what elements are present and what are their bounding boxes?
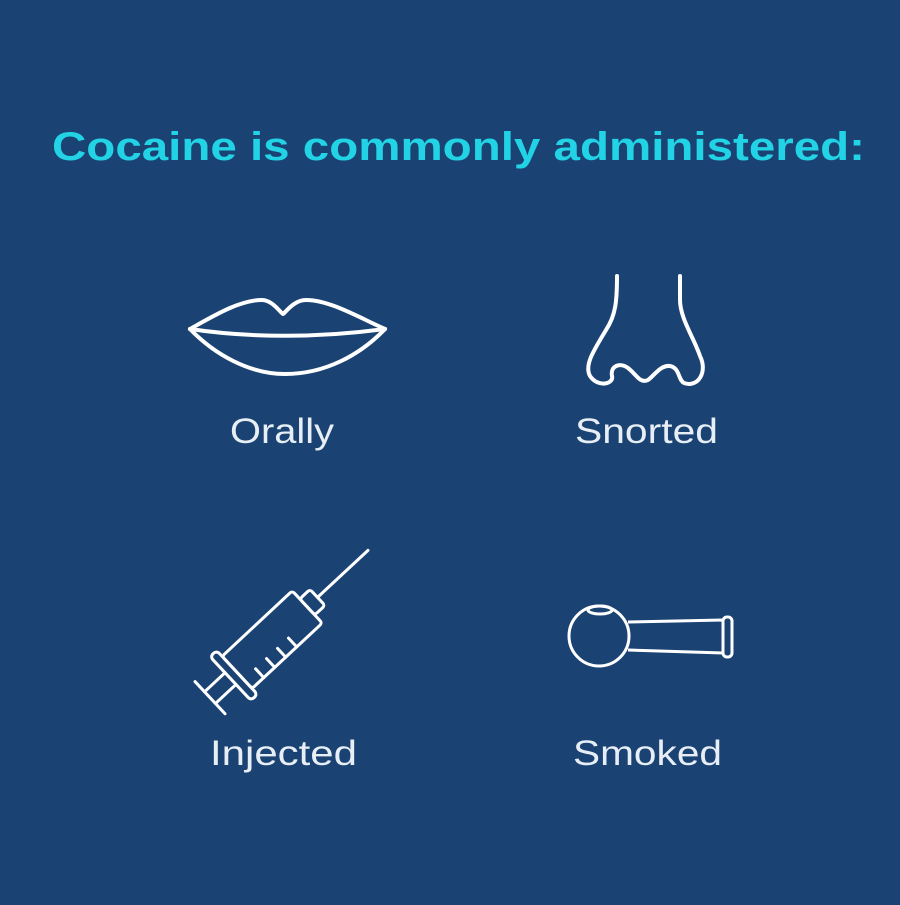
label: Injected: Injected: [210, 734, 357, 773]
label: Smoked: Smoked: [573, 734, 722, 773]
icon: lips: [190, 300, 385, 374]
icon: pipe: [569, 606, 732, 666]
title: Cocaine is commonly administered:: [52, 125, 865, 169]
label: Snorted: Snorted: [575, 412, 718, 451]
icon: nose: [588, 276, 703, 384]
icon: syringe: [190, 528, 388, 720]
label: Orally: Orally: [230, 412, 335, 451]
